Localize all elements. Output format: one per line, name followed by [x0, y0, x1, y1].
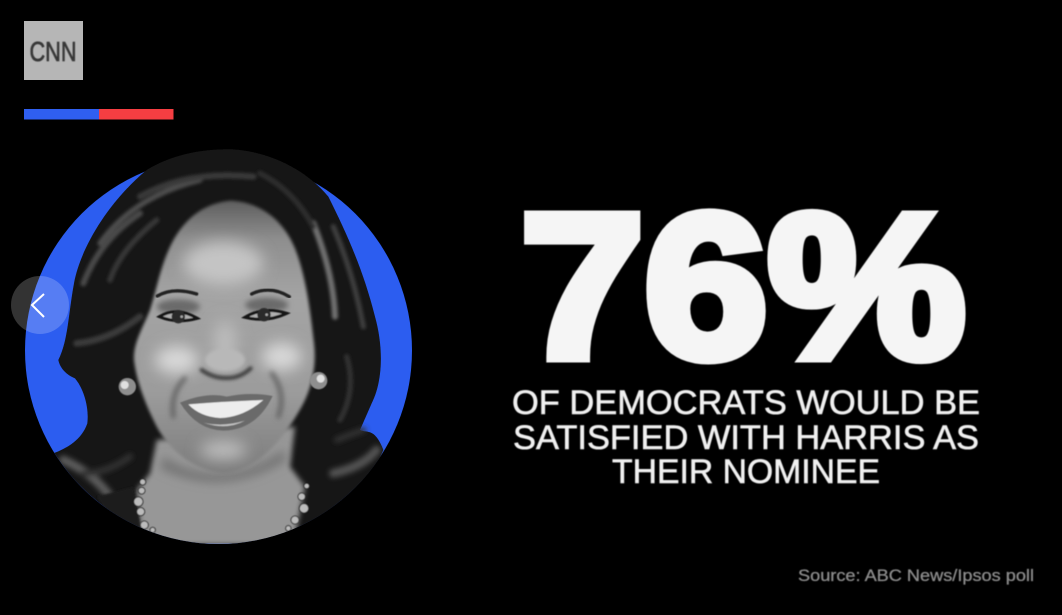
description text [512, 384, 980, 491]
neck shadow [160, 450, 287, 482]
jacket shadow left [100, 491, 141, 528]
blue circle [25, 157, 412, 544]
photo of Kamala Harris [53, 149, 383, 545]
previous arrow button [11, 276, 69, 334]
hair highlights [77, 173, 363, 420]
mouth [180, 394, 273, 431]
description text: OF DEMOCRATS WOULD BE [512, 384, 980, 422]
description text: SATISFIED WITH HARRIS AS [513, 419, 979, 457]
eyes [159, 308, 287, 323]
eyebrows [157, 290, 289, 297]
CNN logo: CNN [30, 36, 76, 67]
description text: THEIR NOMINEE [612, 453, 880, 491]
cheek and forehead highlights [155, 242, 302, 459]
neck and chest [137, 427, 305, 545]
face [134, 201, 315, 473]
lower hair sheen [63, 430, 377, 497]
eye socket shadows [157, 298, 288, 314]
colour bar [24, 109, 174, 120]
hair [53, 149, 383, 543]
CNN logo [24, 21, 83, 80]
big number: 76% [520, 172, 966, 401]
smile lines [173, 373, 281, 417]
nose [202, 349, 251, 378]
earrings [119, 372, 327, 395]
pearl necklace [134, 479, 309, 533]
portrait: blue circle with photo [25, 149, 412, 545]
source note: Source: ABC News/Ipsos poll [798, 567, 1034, 585]
